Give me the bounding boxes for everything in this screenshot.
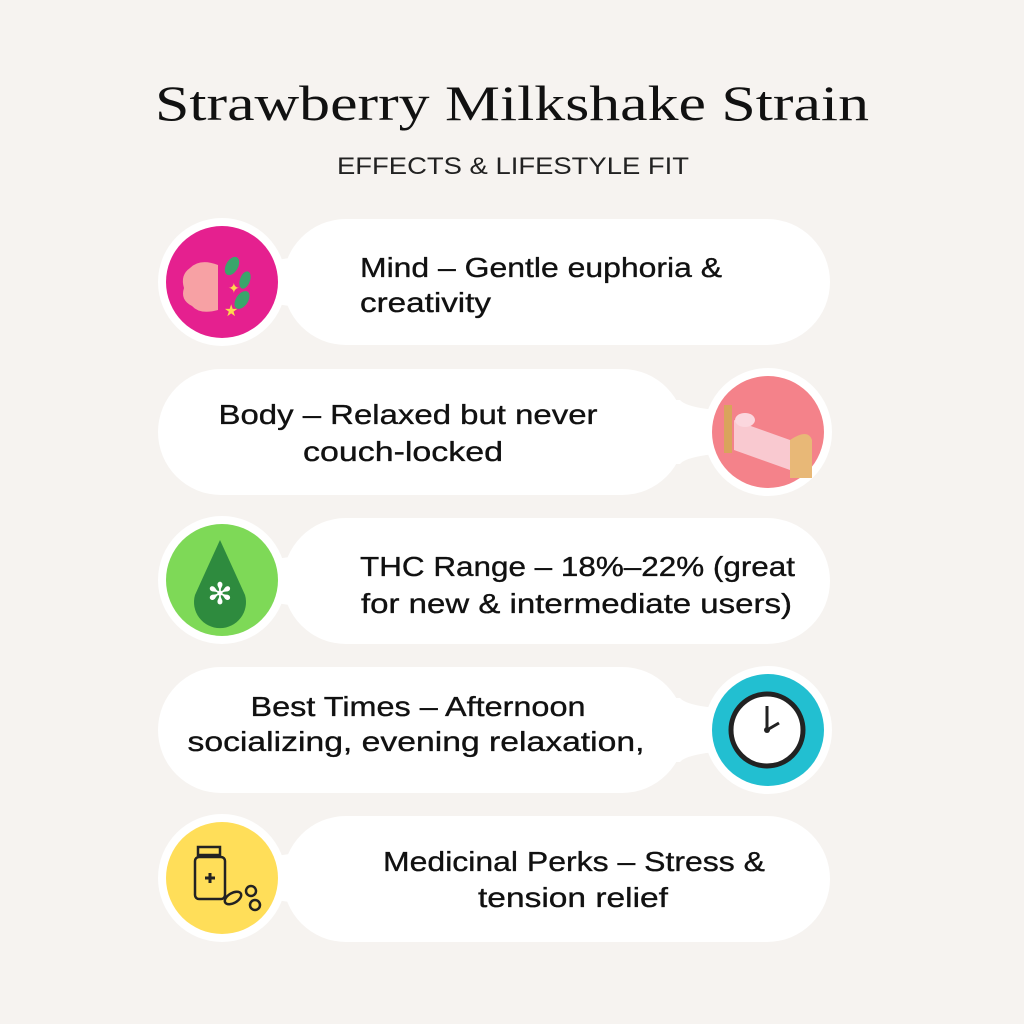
text: body: Body – Relaxed but never <box>218 399 598 430</box>
panel: mind <box>158 218 830 346</box>
text: best times: Best Times – Afternoon <box>250 691 586 722</box>
icon: clock <box>712 674 824 786</box>
icon: brain <box>166 226 278 338</box>
icon: pill bottle <box>166 822 278 934</box>
icon: brain: ✦ <box>228 281 240 297</box>
title: Strawberry Milkshake Strain <box>155 75 869 131</box>
panel: thc <box>158 516 830 644</box>
icon: cannabis drop <box>166 524 278 636</box>
subtitle: EFFECTS & LIFESTYLE FIT <box>337 153 689 180</box>
panel: medicinal <box>158 814 830 942</box>
text: thc: for new & intermediate users) <box>361 588 792 619</box>
icon: bed <box>712 376 824 488</box>
panel: best times <box>158 666 832 794</box>
text: thc: THC Range – 18%–22% (great <box>360 551 795 582</box>
text: medicinal: tension relief <box>478 882 668 913</box>
icon: brain: ★ <box>224 301 238 320</box>
text: best times: socializing, evening relaxation, <box>188 726 644 757</box>
text: body: couch-locked <box>303 436 503 467</box>
text: mind: Mind – Gentle euphoria & <box>360 252 722 283</box>
text: mind: creativity <box>360 287 491 318</box>
panel: body <box>158 368 832 496</box>
icon: cannabis drop: ✻ <box>207 577 233 612</box>
text: medicinal: Medicinal Perks – Stress & <box>383 846 765 877</box>
